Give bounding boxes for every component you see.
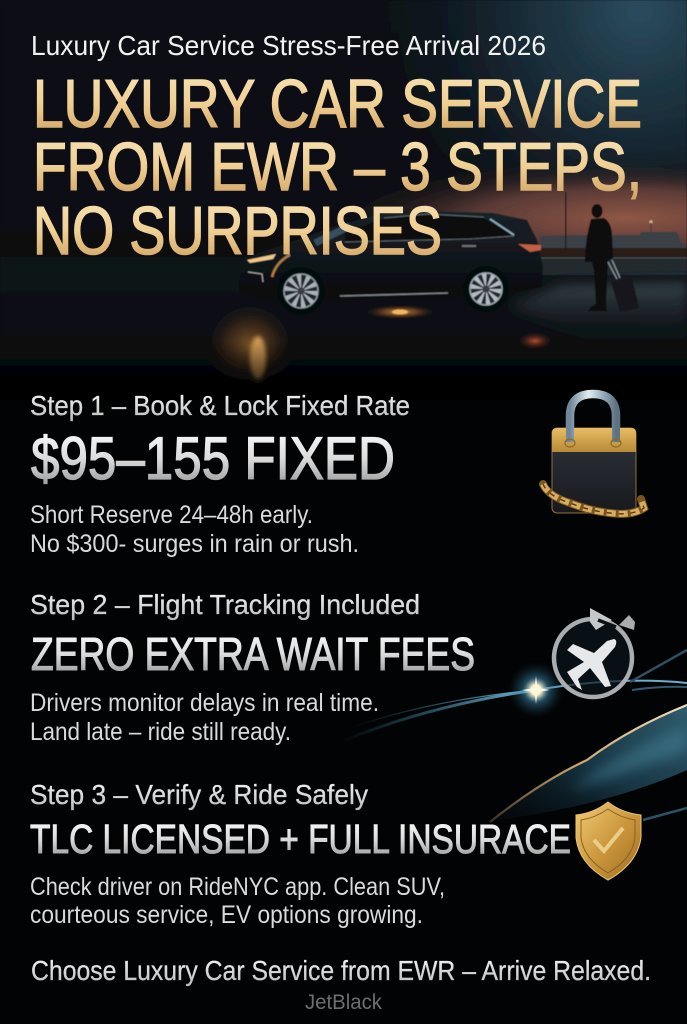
step 2: [30, 589, 475, 746]
hood glow: [272, 255, 290, 277]
hero photo: airport dusk scene: [0, 0, 687, 400]
step 3 heading: Step 3 – Verify & Ride Safely: [30, 779, 368, 810]
windows: [345, 215, 514, 243]
wet ground: [0, 275, 687, 400]
step 1 price: $95–155 FIXED: [31, 425, 395, 492]
road barrier: [0, 257, 687, 278]
main title: NO SURPRISES: [33, 193, 442, 269]
step 1: [30, 390, 410, 558]
subtitle: Luxury Car Service Stress-Free Arrival 2026: [31, 30, 546, 61]
icon: padlock with chain: [543, 394, 644, 514]
step 1 description: [30, 501, 359, 558]
SUV: [239, 211, 543, 315]
step 1 description: No $300- surges in rain or rush.: [30, 530, 359, 558]
traveler silhouette with suitcase: [585, 204, 639, 312]
sill: [340, 293, 448, 296]
icon: gold shield with check: [576, 802, 641, 880]
light streak background: [340, 650, 687, 822]
distant terminal skyline: [540, 192, 687, 257]
tail light: [518, 244, 541, 252]
step 3 description: courteous service, EV options growing.: [30, 901, 423, 929]
step 3 headline: TLC LICENSED + FULL INSURACE: [30, 816, 571, 862]
headlight: [247, 254, 276, 263]
step 3 description: [30, 873, 445, 929]
rear wheel: [463, 266, 509, 312]
fade to black: [0, 340, 687, 400]
step 2 description: [30, 689, 379, 746]
step 2 description: Drivers monitor delays in real time.: [30, 689, 379, 717]
step 3: [30, 779, 571, 929]
main title: [33, 66, 642, 269]
sky: [0, 0, 687, 262]
step 2 description: Land late – ride still ready.: [30, 718, 291, 746]
door handle: [462, 245, 476, 247]
headlight reflection: [206, 304, 552, 388]
step 3 description: Check driver on RideNYC app. Clean SUV,: [30, 873, 445, 901]
icon: flight tracking plane in circle: [554, 608, 635, 697]
front wheel: [277, 267, 325, 315]
brand name: JetBlack: [305, 991, 382, 1014]
wet pavement sheen: [510, 282, 687, 345]
step 1 heading: Step 1 – Book & Lock Fixed Rate: [30, 390, 410, 421]
step 2 headline: ZERO EXTRA WAIT FEES: [31, 628, 475, 680]
step 2 heading: Step 2 – Flight Tracking Included: [30, 589, 420, 620]
step 1 description: Short Reserve 24–48h early.: [30, 501, 313, 529]
lens flare: [508, 662, 564, 718]
